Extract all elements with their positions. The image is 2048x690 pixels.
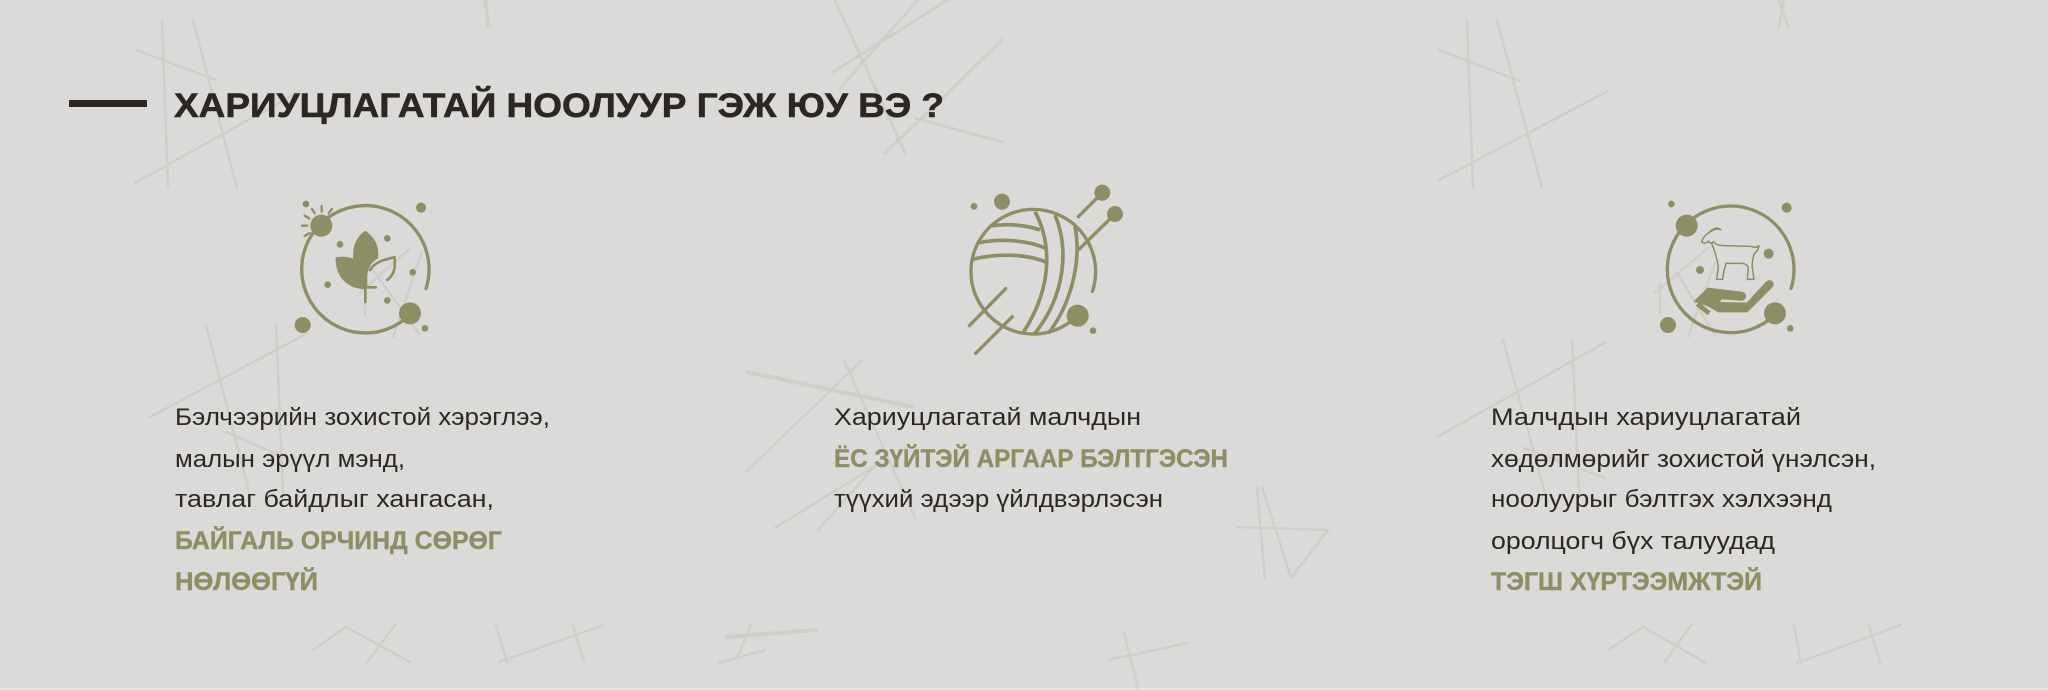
text block: column 1: тавлаг байдлыг хангасан, (175, 486, 494, 513)
icon: yarn ball with needles (969, 185, 1123, 353)
heading dash (69, 100, 147, 107)
text block: column 2 (834, 404, 1228, 513)
title: ХАРИУЦЛАГАТАЙ НООЛУУР ГЭЖ ЮУ ВЭ ? (174, 86, 944, 125)
text block: column 3: оролцогч бүх талуудад (1491, 528, 1775, 555)
icon: leaf in circle (295, 201, 429, 333)
text block: column 3: ТЭГШ ХҮРТЭЭМЖТЭЙ (1491, 566, 1762, 596)
text block: column 1: БАЙГАЛЬ ОРЧИНД СӨРӨГ (175, 525, 502, 555)
text block: column 1: малын эрүүл мэнд, (175, 446, 405, 473)
text block: column 1: Бэлчээрийн зохистой хэрэглээ, (175, 404, 550, 431)
text block: column 3: ноолуурыг бэлтгэх хэлхээнд (1491, 486, 1832, 513)
text block: column 3 (1491, 404, 1876, 596)
text block: column 2: Хариуцлагатай малчдын (834, 404, 1141, 431)
text block: column 1: НӨЛӨӨГҮЙ (175, 566, 318, 596)
text block: column 3: Малчдын хариуцлагатай (1491, 404, 1801, 431)
text block: column 1 (175, 404, 550, 596)
icon: goat over hand (1660, 201, 1794, 333)
text block: column 2: түүхий эдээр үйлдвэрлэсэн (834, 486, 1163, 513)
text block: column 2: ЁС ЗҮЙТЭЙ АРГААР БЭЛТГЭСЭН (834, 443, 1228, 473)
text block: column 3: хөдөлмөрийг зохистой үнэлсэн, (1491, 446, 1876, 473)
